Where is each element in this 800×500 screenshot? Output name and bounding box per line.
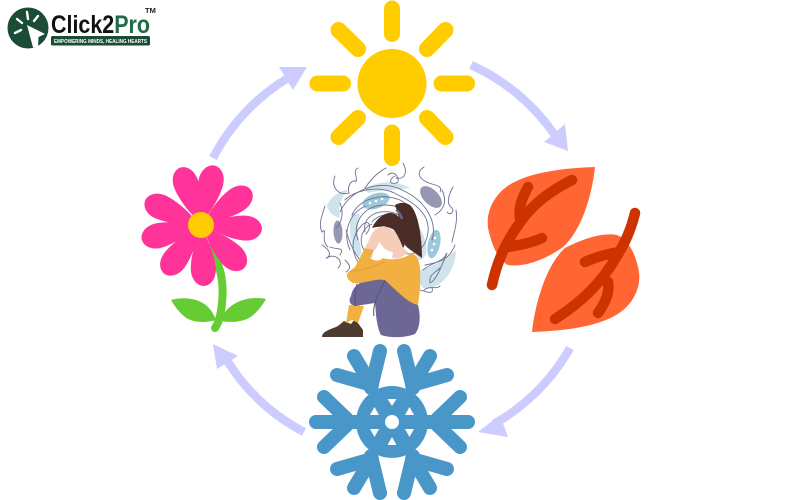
lower leaf xyxy=(532,213,639,332)
logo tagline xyxy=(51,36,150,46)
arrow: autumn to winter xyxy=(478,348,570,437)
logo: Click2Pro xyxy=(8,6,156,48)
flower stem xyxy=(210,247,223,328)
arrow: spring to summer xyxy=(213,67,307,158)
icon: flower xyxy=(139,163,266,328)
logo tagline: EMPOWERING MINDS, HEALING HEARTS xyxy=(54,39,148,45)
woman: socks xyxy=(346,305,364,323)
logo wordmark: Click2Pro xyxy=(51,11,150,39)
trademark: TM xyxy=(145,6,156,15)
arrow: winter to spring xyxy=(213,344,304,432)
flower petals xyxy=(139,163,263,287)
woman: hair xyxy=(372,213,405,248)
upper leaf xyxy=(488,167,595,285)
woman: neck and face xyxy=(378,228,408,259)
woman: shoes xyxy=(322,319,363,337)
tangled thought swirls xyxy=(320,163,457,292)
illustration: distressed woman with tangled thoughts xyxy=(320,163,457,337)
icon: sun xyxy=(318,8,467,158)
icon: autumn leaves xyxy=(488,167,639,332)
woman: hand over face xyxy=(365,226,394,250)
icon: logo cursor badge xyxy=(8,8,48,48)
woman: knee shadow xyxy=(355,281,385,316)
woman: ponytail xyxy=(395,203,422,258)
woman: sweater shading xyxy=(350,262,385,271)
icon: snowflake xyxy=(316,351,468,493)
cycle arrows xyxy=(213,65,570,437)
arrow: summer to autumn xyxy=(471,65,568,151)
woman: hair band xyxy=(396,210,402,219)
woman: sweater xyxy=(347,248,420,305)
flower leaves xyxy=(171,298,266,322)
flower centre xyxy=(188,212,214,238)
woman: trousers xyxy=(350,279,420,337)
